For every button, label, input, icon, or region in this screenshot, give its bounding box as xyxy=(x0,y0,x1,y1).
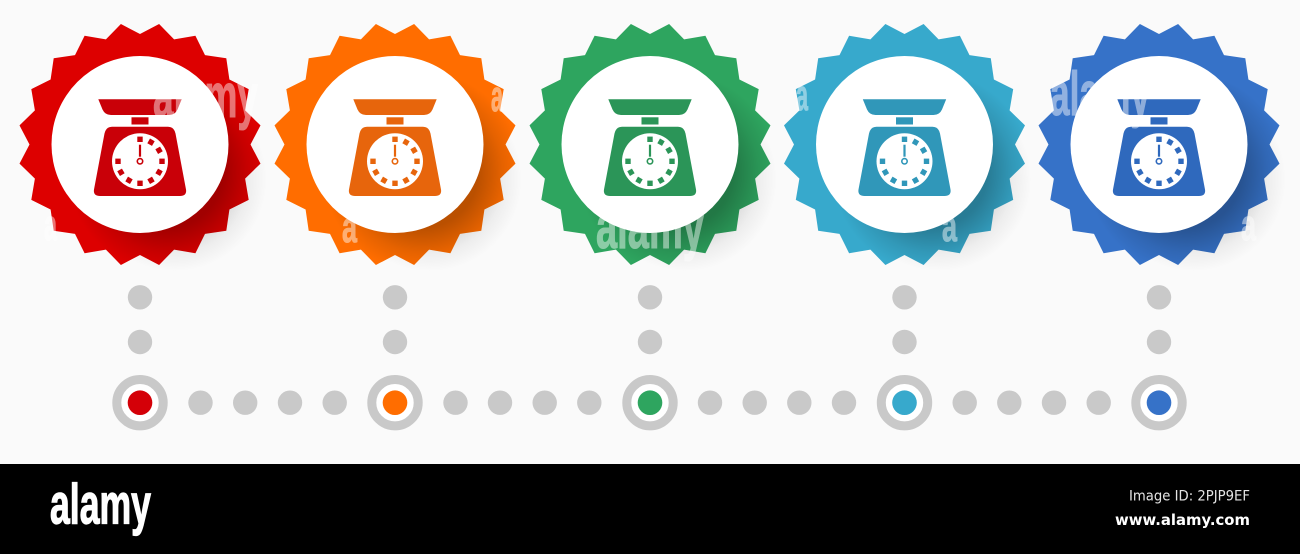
stock watermarks: a xyxy=(491,72,503,121)
timeline node: blue xyxy=(1136,380,1182,426)
badge: red scale xyxy=(20,24,268,272)
stock watermarks: a xyxy=(942,202,957,251)
timeline node: teal xyxy=(881,380,928,426)
timeline node: green xyxy=(627,380,673,426)
footer logo: alamy xyxy=(50,472,151,536)
stock watermarks: alamy xyxy=(1050,60,1150,129)
stock watermarks: a xyxy=(796,71,808,120)
timeline node: red xyxy=(117,380,163,426)
badge: teal scale xyxy=(784,24,1032,272)
stock watermarks: a xyxy=(342,203,357,252)
timeline node: orange xyxy=(372,380,418,426)
badge: orange scale xyxy=(274,24,523,272)
stock watermarks: a xyxy=(1241,201,1256,250)
image id: Image ID: 2PJP9EF xyxy=(1129,488,1250,504)
stock watermarks: a xyxy=(44,201,57,250)
stock watermarks: alamy xyxy=(596,193,704,262)
stock watermarks: alamy xyxy=(153,62,258,131)
horizontal connector dots xyxy=(188,390,1111,415)
footer band xyxy=(0,464,1300,554)
badge: blue scale xyxy=(1038,24,1287,272)
stock watermarks xyxy=(44,60,1256,262)
website: www.alamy.com xyxy=(1115,511,1250,529)
vertical connector dots xyxy=(128,285,1171,354)
badge: green scale xyxy=(530,24,778,272)
